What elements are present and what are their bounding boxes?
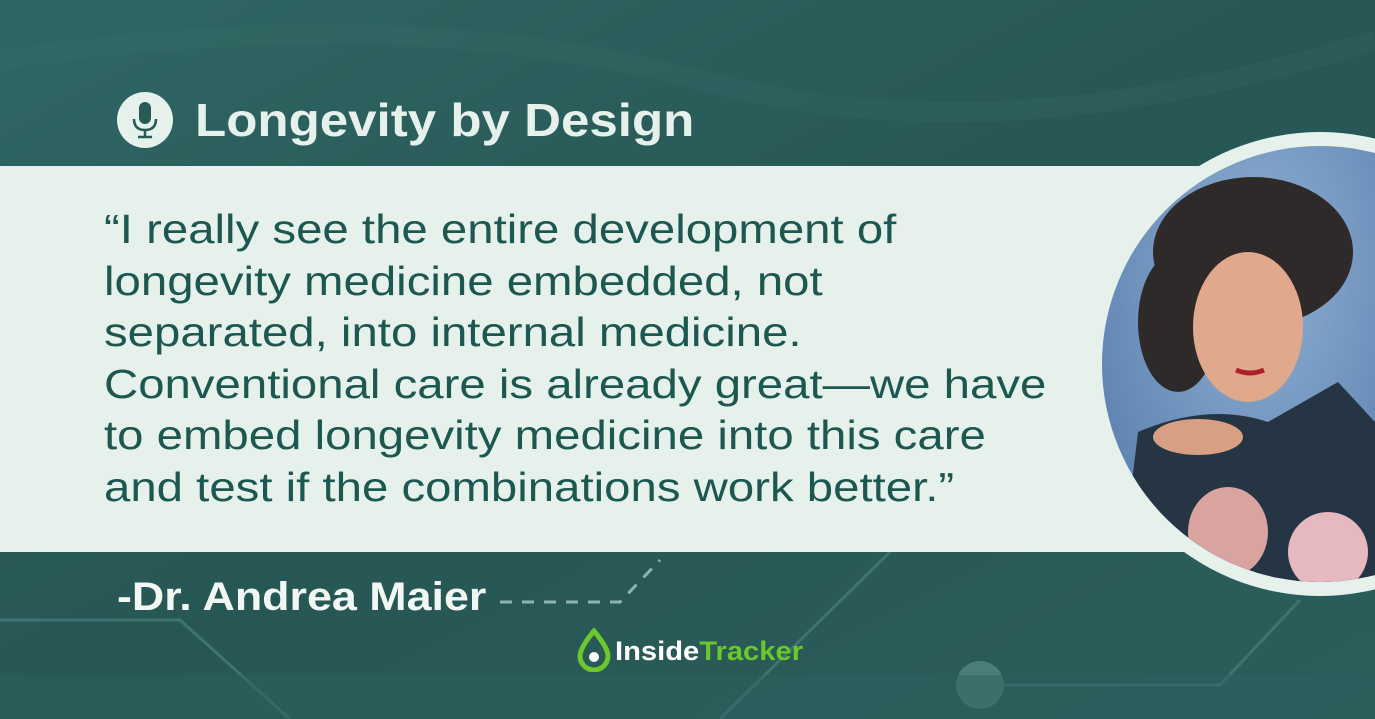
portrait photo — [1102, 132, 1375, 596]
logo: InsideTracker — [578, 628, 803, 672]
quote text: separated, into internal medicine. — [104, 309, 802, 355]
title: Longevity by Design — [195, 94, 694, 146]
logo: InsideTracker: InsideTracker — [615, 636, 803, 666]
quote text: Conventional care is already great—we have — [104, 360, 1046, 406]
quote band — [0, 166, 1200, 552]
signature: -Dr. Andrea Maier — [117, 575, 486, 619]
quote text: “I really see the entire development of — [104, 206, 896, 252]
quote text: and test if the combinations work better.” — [104, 464, 954, 510]
quote text: to embed longevity medicine into this care — [104, 412, 986, 458]
quote text: longevity medicine embedded, not — [104, 258, 823, 304]
icon: microphone — [117, 92, 173, 148]
quote text — [104, 206, 1046, 510]
